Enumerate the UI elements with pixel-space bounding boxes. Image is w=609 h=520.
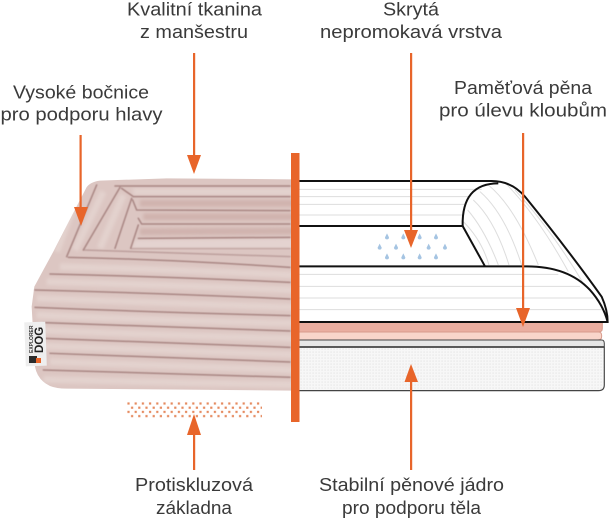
label: stable foam core: pro podporu těla xyxy=(342,497,482,518)
label: waterproof layer xyxy=(320,0,503,42)
label: memory foam xyxy=(439,77,607,120)
label: corduroy fabric xyxy=(127,0,263,42)
icon: product label: DOG xyxy=(34,327,46,353)
label: corduroy fabric: z manšestru xyxy=(140,21,248,42)
label: anti-slip base: Protiskluzová xyxy=(135,474,254,495)
cover outline and stripes xyxy=(298,181,608,322)
arrow: memory foam xyxy=(516,133,530,327)
anti-slip base dots xyxy=(127,402,262,418)
base foam core xyxy=(298,340,604,391)
arrow: foam core xyxy=(404,364,418,470)
icon: water drops xyxy=(378,233,447,259)
label: memory foam: pro úlevu kloubům xyxy=(439,100,607,120)
arrow: waterproof layer xyxy=(404,53,418,248)
icon: product label: EXPLORER xyxy=(29,325,35,353)
label: high sides xyxy=(0,82,163,124)
label: stable foam core xyxy=(319,474,504,518)
illustration: layered cross-section xyxy=(298,181,608,391)
divider bar xyxy=(291,153,300,422)
illustration: corduroy dog bed xyxy=(32,178,293,391)
label: stable foam core: Stabilní pěnové jádro xyxy=(319,474,504,495)
corduroy grooves xyxy=(35,185,290,377)
memory foam layers xyxy=(298,322,602,340)
label: anti-slip base xyxy=(135,474,254,518)
label: waterproof layer: nepromokavá vrstva xyxy=(320,21,503,42)
label: anti-slip base: základna xyxy=(156,497,233,518)
label: memory foam: Paměťová pěna xyxy=(454,77,593,98)
label: high sides: Vysoké bočnice xyxy=(13,82,149,102)
arrow: anti-slip xyxy=(187,414,201,470)
arrow: corduroy xyxy=(187,53,201,174)
icon: product label xyxy=(24,322,47,366)
arrow: high sides xyxy=(74,135,88,226)
label: high sides: pro podporu hlavy xyxy=(0,104,163,124)
